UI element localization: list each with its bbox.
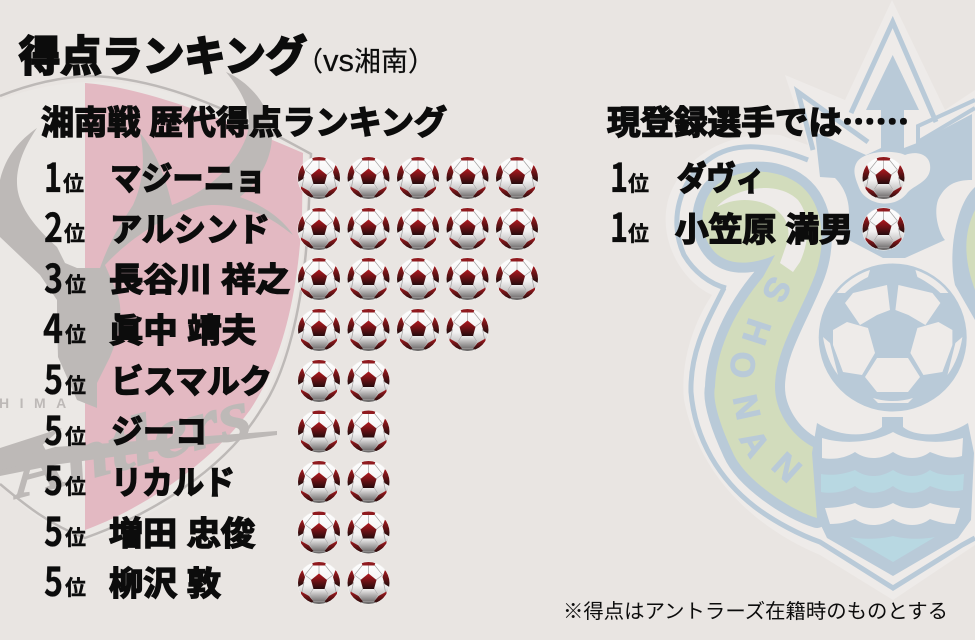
- row 3: 3: [44, 247, 63, 305]
- row 2: [44, 196, 538, 254]
- crest: trident outlines: [798, 22, 975, 150]
- row 4: [43, 297, 489, 355]
- crest: SHONAN letters: H: [734, 314, 778, 349]
- crest: SHONAN letters: [722, 271, 808, 490]
- current player 2: 1: [610, 196, 628, 254]
- row 2: 位: [64, 223, 85, 246]
- crest: SHONAN letters: N: [725, 391, 767, 423]
- crest: shield: [812, 417, 974, 576]
- row 9: 位: [65, 577, 86, 600]
- row 5: 位: [65, 375, 86, 398]
- row 1: マジーニョ: [110, 160, 266, 197]
- crest: antlers: [0, 72, 293, 408]
- crest: outline: [0, 76, 311, 538]
- row 6: [44, 399, 390, 457]
- crest: right band green: [966, 210, 975, 290]
- row 5: [44, 348, 390, 406]
- crest: right band: [952, 187, 975, 320]
- crest: band inner stripe: [717, 188, 807, 272]
- crest: HIMA lettering: HIMA: [0, 395, 77, 411]
- current player 2: 小笠原 満男: [675, 211, 853, 248]
- row 9: [44, 550, 390, 608]
- row 8: [44, 500, 390, 558]
- crest: SHONAN letters: S: [754, 271, 798, 308]
- row 7: リカルド: [111, 464, 235, 501]
- crest: halo: [666, 0, 975, 600]
- row 7: [44, 449, 390, 507]
- row 1: 位: [63, 173, 84, 196]
- row 3: 位: [65, 274, 86, 297]
- heading: current players: 現登録選手では……: [607, 96, 909, 144]
- row 8: 位: [65, 527, 86, 550]
- crest: Antlers script: Antlers: [0, 373, 259, 515]
- current player 1: 1: [610, 146, 628, 204]
- current player 1: ダヴィ: [677, 160, 765, 197]
- heading: all-time ranking: 湘南戦 歴代得点ランキング: [41, 104, 447, 141]
- row 4: 4: [43, 297, 63, 355]
- row 2: アルシンド: [110, 211, 270, 248]
- crest: SHONAN letters: N: [764, 445, 808, 490]
- row 6: 位: [65, 426, 86, 449]
- row 1: [44, 146, 538, 204]
- crest: SHONAN letters: A: [732, 423, 777, 464]
- footnote: ※得点はアントラーズ在籍時のものとする: [563, 600, 948, 623]
- row 4: 眞中 靖夫: [109, 312, 256, 349]
- crest: outer shield line: [691, 288, 975, 588]
- row 8: 増田 忠俊: [109, 515, 255, 552]
- current player 2: [610, 196, 905, 254]
- title suffix: （vs湘南）: [296, 43, 435, 78]
- row 1: 1: [44, 146, 62, 204]
- crest: spiral outer line: [677, 147, 808, 288]
- row 9: 5: [44, 550, 63, 608]
- current player 1: 位: [628, 173, 649, 196]
- crest: trident light lobes: [854, 152, 930, 204]
- title: 得点ランキング: [19, 33, 307, 80]
- row 5: 5: [44, 348, 63, 406]
- current player 1: [610, 146, 905, 204]
- row 5: ビスマルク: [111, 363, 272, 400]
- row 7: 位: [65, 476, 86, 499]
- crest: football: [819, 264, 967, 412]
- Kashima Antlers crest watermark: [0, 72, 311, 540]
- row 9: 柳沢 敦: [109, 565, 221, 602]
- row 3: 長谷川 祥之: [109, 261, 290, 298]
- crest: SHONAN letters: O: [722, 350, 762, 380]
- crest: pink half: [85, 83, 303, 530]
- row 7: 5: [44, 449, 63, 507]
- row 3: [44, 247, 538, 305]
- row 4: 位: [65, 324, 86, 347]
- row 6: 5: [44, 399, 63, 457]
- row 8: 5: [44, 500, 63, 558]
- crest: green band: [702, 172, 822, 518]
- Shonan Bellmare crest watermark: [666, 0, 975, 600]
- crest: trident body: [815, 55, 972, 258]
- row 6: ジーコ: [111, 413, 207, 450]
- row 2: 2: [44, 196, 63, 254]
- current player 2: 位: [628, 223, 649, 246]
